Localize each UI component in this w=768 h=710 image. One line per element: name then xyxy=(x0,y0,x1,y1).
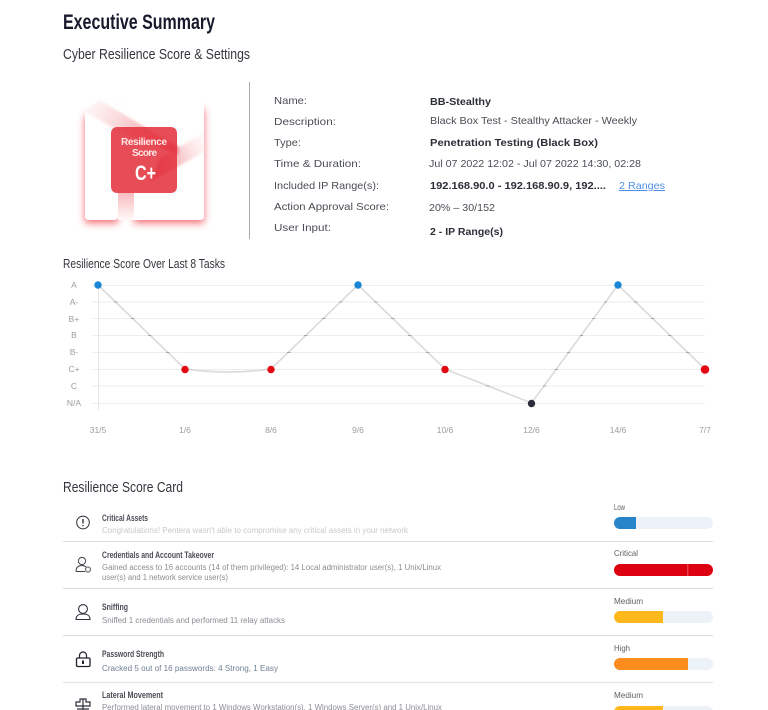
icon: resilience score badge xyxy=(85,100,204,223)
row: sniffing: Sniffed 1 credentials and performed 11 relay attacks xyxy=(102,616,285,625)
row: password strength: High xyxy=(614,644,630,653)
line chart: resilience score: 31/5 xyxy=(90,425,107,435)
line chart: resilience score: 9/6 xyxy=(352,425,364,435)
icon: user with gear xyxy=(76,557,90,572)
score card heading: Resilience Score Card xyxy=(63,480,183,496)
settings table: BB-Stealthy xyxy=(430,96,491,108)
line chart: resilience score: C xyxy=(71,381,77,391)
score card square: Resilience xyxy=(121,137,167,148)
settings table: Type: xyxy=(274,137,301,149)
row: password strength xyxy=(76,644,713,673)
row: credentials and account takeover: Credentials and Account Takeover xyxy=(102,550,214,560)
line chart: resilience score: B+ xyxy=(69,314,79,324)
row: sniffing: Medium xyxy=(614,597,643,606)
row: critical assets: Low xyxy=(614,503,625,512)
row: credentials and account takeover: Critical xyxy=(614,549,638,558)
settings table: Penetration Testing (Black Box) xyxy=(430,137,598,149)
settings table: 2 - IP Range(s) xyxy=(430,226,503,238)
score card square: Score xyxy=(132,148,157,159)
row: lateral movement xyxy=(76,690,713,710)
line chart: resilience score: 14/6 xyxy=(610,425,627,435)
row: password strength: Cracked 5 out of 16 passwords: 4 Strong, 1 Easy xyxy=(102,664,278,673)
row: sniffing xyxy=(76,597,713,625)
row: critical assets: Congratulations! Pentera wasn't able to compromise any critical assets in your network xyxy=(102,526,409,535)
line chart: resilience score: 8/6 xyxy=(265,425,277,435)
settings table: Action Approval Score: xyxy=(274,201,389,213)
score card square: C+ xyxy=(135,162,156,185)
line chart: resilience score: 12/6 xyxy=(523,425,540,435)
settings table: Description: xyxy=(274,116,336,128)
title: Executive Summary xyxy=(63,10,215,34)
row: credentials and account takeover: user(s) and 1 network service user(s) xyxy=(102,573,228,582)
line chart: resilience score: A- xyxy=(70,297,78,307)
icon: network nodes xyxy=(76,699,90,710)
row: sniffing: Sniffing xyxy=(102,602,128,612)
settings table: 20% – 30/152 xyxy=(429,202,495,214)
line chart: resilience score: N/A xyxy=(67,398,81,408)
line chart: resilience score: 1/6 xyxy=(179,425,191,435)
row: password strength: Password Strength xyxy=(102,649,164,659)
row: lateral movement: Medium xyxy=(614,691,643,700)
row: critical assets: Critical Assets xyxy=(102,513,148,523)
settings table: User Input: xyxy=(274,222,331,234)
line chart: resilience score: A xyxy=(71,280,77,290)
settings table: Black Box Test - Stealthy Attacker - Weekly xyxy=(430,115,638,127)
line chart: resilience score: C+ xyxy=(68,364,80,374)
line chart: resilience score xyxy=(67,280,711,435)
settings table: 2 Ranges xyxy=(619,180,665,192)
settings table: Included IP Range(s): xyxy=(274,180,379,192)
icon: padlock xyxy=(76,652,90,666)
settings table: 192.168.90.0 - 192.168.90.9, 192.... xyxy=(430,180,606,192)
chart title: Resilience Score Over Last 8 Tasks xyxy=(63,257,225,271)
settings table xyxy=(274,95,665,238)
row: lateral movement: Lateral Movement xyxy=(102,690,163,700)
line chart: resilience score: B xyxy=(71,330,77,340)
settings table: Time & Duration: xyxy=(274,158,361,170)
settings table: Name: xyxy=(274,95,307,107)
subtitle: Cyber Resilience Score & Settings xyxy=(63,47,250,63)
line chart: resilience score: 7/7 xyxy=(699,425,711,435)
line chart: resilience score: B- xyxy=(70,347,78,357)
row: critical assets xyxy=(77,503,713,535)
row: credentials and account takeover: Gained access to 16 accounts (14 of them privileged): 14 Local administrator user(s), 1 Unix/Linux xyxy=(102,563,441,572)
line chart: resilience score: 10/6 xyxy=(437,425,454,435)
icon: user xyxy=(76,605,90,620)
score card square xyxy=(111,127,177,193)
row: credentials and account takeover xyxy=(76,549,713,582)
panel: score card rows xyxy=(63,503,713,710)
icon: alert circle xyxy=(77,516,89,529)
settings table: Jul 07 2022 12:02 - Jul 07 2022 14:30, 02:28 xyxy=(429,158,641,170)
